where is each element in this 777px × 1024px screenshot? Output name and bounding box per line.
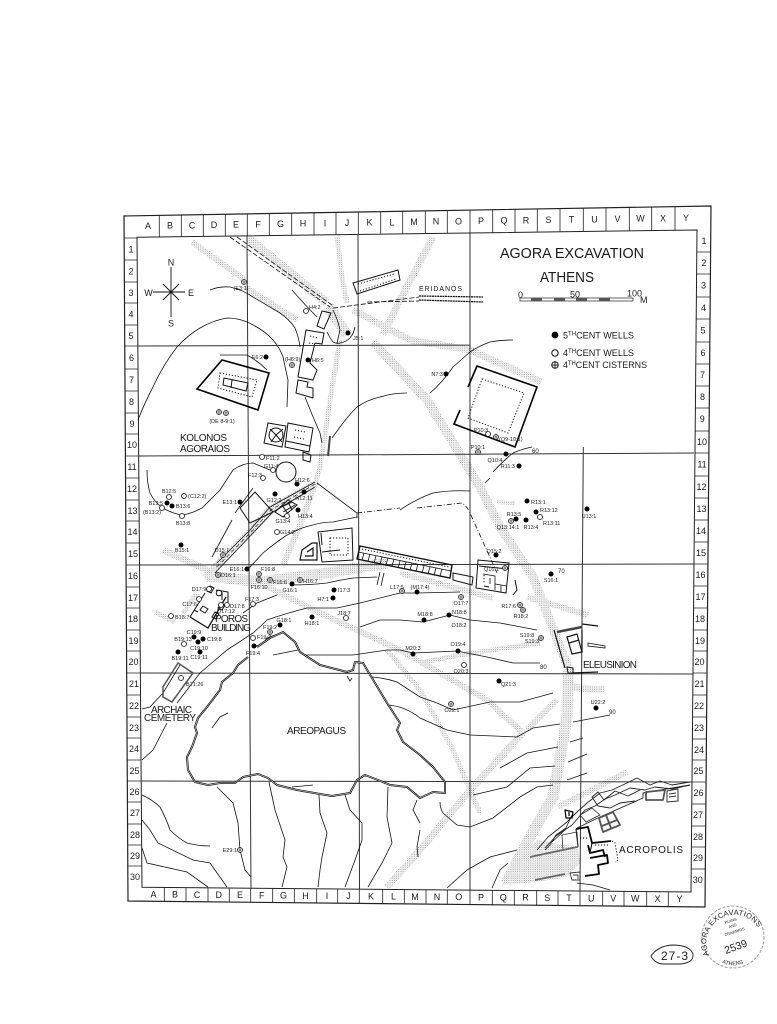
- legend: 4: [563, 348, 568, 358]
- well markers: 4th century wells with labels: (B13:2): [143, 510, 161, 516]
- circular archive stamp: AND: [728, 923, 737, 929]
- well markers: 5th century wells with labels: O19:4: [451, 642, 465, 648]
- row numbers right: 24: [694, 745, 704, 755]
- well markers: 5th century wells with labels: C19:10: [190, 646, 208, 652]
- row numbers right: 8: [700, 392, 705, 402]
- well markers: 4th century wells with labels: D17:9: [192, 587, 206, 593]
- cistern markers with labels: R18:2: [514, 614, 528, 620]
- place name labels: AGORAIOS: [180, 444, 230, 455]
- circular archive stamp: AGORA EXCAVATIONS: [701, 910, 762, 956]
- Eridanos channel and drains: [215, 237, 483, 573]
- compass rose: [144, 258, 194, 328]
- cistern markers with labels: Q13:14:1: [497, 525, 519, 531]
- building: Stoa of Attalos: [357, 546, 473, 586]
- well markers: 4th century wells with labels: H4:2: [309, 305, 321, 311]
- well markers: 4th century wells with labels: O20:3: [454, 669, 468, 675]
- title: ATHENS: [540, 270, 594, 286]
- compass rose: S: [168, 318, 174, 328]
- well markers: 4th century wells with labels: D17:12: [217, 609, 235, 615]
- well markers: 5th century wells with labels: S16:1: [544, 578, 558, 584]
- row numbers right: 22: [694, 701, 704, 711]
- cistern markers with labels: S19:3: [525, 639, 539, 645]
- row numbers left: 9: [129, 419, 135, 429]
- row numbers right: 7: [700, 370, 705, 380]
- row numbers right: 12: [696, 482, 707, 492]
- well markers: 5th century wells with labels: Q21:3: [501, 682, 516, 688]
- legend: TH: [568, 332, 576, 338]
- place name labels: ELEUSINION: [583, 660, 637, 671]
- buildings: southeast square and Q16 house: [476, 560, 517, 595]
- row numbers left: 10: [127, 440, 137, 450]
- well markers: 5th century wells with labels: R13:5: [507, 512, 521, 518]
- column letters bottom: ABCDEFGHIJKLMNOPQRSTUVWXY: [150, 890, 683, 904]
- cistern markers with labels: D15:1: [215, 548, 229, 554]
- well markers: 5th century wells with labels: H12:6: [295, 478, 310, 484]
- cistern markers with labels: F16:6: [273, 580, 287, 586]
- row numbers left: [127, 244, 140, 882]
- row numbers left: 16: [128, 571, 138, 581]
- well markers: 5th century wells with labels: E6:2: [252, 355, 263, 361]
- well markers: 4th century wells with labels: B19:13: [174, 637, 192, 643]
- row numbers left: 3: [128, 288, 134, 298]
- scale bar: [518, 288, 648, 305]
- row numbers left: 15: [128, 549, 138, 559]
- circular archive stamp: DRAWINGS: [724, 927, 746, 937]
- stippled ancient roads: [155, 237, 627, 887]
- cistern markers with labels: D16:1: [221, 573, 236, 579]
- buildings and walls: Acropolis: [530, 778, 690, 880]
- row numbers right: 28: [693, 832, 703, 842]
- row numbers right: 18: [695, 614, 705, 624]
- row numbers right: 17: [695, 592, 706, 602]
- legend: [552, 330, 647, 370]
- well markers: 4th century wells with labels: J18:7: [337, 611, 351, 617]
- well markers: 5th century wells with labels: M20:3: [405, 646, 421, 652]
- cistern markers with labels: E29:1: [223, 848, 237, 854]
- row numbers left: 11: [127, 462, 137, 472]
- row numbers right: 5: [700, 326, 706, 336]
- cistern markers with labels: P10:1: [471, 445, 485, 451]
- row numbers left: 7: [129, 375, 134, 385]
- row numbers left: 23: [129, 723, 139, 733]
- row numbers right: 25: [693, 766, 704, 776]
- well markers: 4th century wells with labels: B13:8: [176, 521, 190, 527]
- well markers: 5th century wells with labels: N7:3: [431, 372, 443, 378]
- well markers: 4th century wells with labels: G11:4: [264, 464, 278, 470]
- Areopagus rock outline: [187, 632, 445, 798]
- row numbers left: 18: [128, 614, 138, 624]
- place name labels: BUILDING: [211, 623, 251, 634]
- cistern markers with labels: F16:10: [250, 585, 268, 591]
- title: AGORA EXCAVATION: [500, 246, 644, 262]
- legend: 5: [563, 330, 568, 340]
- cistern markers with labels: S19:8: [520, 633, 534, 639]
- row numbers right: 4: [701, 303, 706, 313]
- cistern markers with labels: R17:6: [501, 604, 516, 610]
- legend: CENT CISTERNS: [576, 360, 647, 370]
- row numbers left: 22: [129, 701, 139, 711]
- row numbers right: 11: [697, 460, 707, 470]
- row numbers right: 27: [693, 810, 703, 820]
- title: [500, 246, 644, 286]
- well markers: 5th century wells with labels: R13:4: [524, 525, 538, 531]
- contour elevation labels: 80: [540, 665, 547, 671]
- row numbers right: 10: [697, 437, 707, 447]
- cistern markers with labels: [209, 280, 544, 854]
- well markers: 4th century wells with labels: B21:26: [186, 682, 203, 688]
- place name labels: CEMETERY: [144, 713, 196, 724]
- well markers: 4th century wells with labels: B18:7: [175, 615, 189, 621]
- place name labels: ARCHAIC: [151, 705, 192, 716]
- well markers: 4th century wells with labels: R13:11: [543, 521, 560, 527]
- compass rose: W: [144, 288, 153, 298]
- well markers: 5th century wells with labels: B15:1: [175, 548, 189, 554]
- catalogue number tag: 27-3: [661, 949, 688, 963]
- circular archive stamp: PLANS: [724, 917, 738, 925]
- compass rose: N: [168, 258, 174, 268]
- building: Eleusinion: [554, 624, 605, 673]
- cistern markers with labels: F19:2: [263, 625, 277, 631]
- place name labels: ERIDANOS: [419, 286, 462, 293]
- well markers: 5th century wells with labels: B13:5: [149, 501, 163, 507]
- legend: CENT WELLS: [576, 330, 634, 340]
- row numbers left: 14: [127, 527, 138, 537]
- well markers: 5th century wells with labels: M18:8: [417, 612, 433, 618]
- scale bar: 0: [518, 290, 523, 300]
- row numbers left: 21: [129, 679, 139, 689]
- row numbers left: 4: [128, 310, 134, 320]
- contour elevation labels: [532, 449, 616, 716]
- well markers: 5th century wells with labels: H13:4: [298, 514, 313, 520]
- well markers: 5th century wells with labels: N18:8: [452, 610, 467, 616]
- well markers: 4th century wells with labels: [143, 305, 560, 688]
- legend: CENT WELLS: [576, 348, 634, 358]
- place name labels: [144, 286, 683, 856]
- row numbers right: 3: [701, 280, 706, 290]
- cistern markers with labels: O17:7: [454, 601, 468, 607]
- well markers: 5th century wells with labels: C19:9: [187, 630, 201, 636]
- well markers: 4th century wells with labels: D17:8: [230, 604, 245, 610]
- contour elevation labels: 70: [558, 569, 565, 575]
- well markers: 5th century wells with labels: G12:2: [267, 498, 281, 504]
- row numbers left: 27: [130, 808, 140, 818]
- legend: TH: [568, 349, 576, 355]
- contour elevation labels: 90: [609, 710, 616, 716]
- cistern markers with labels: (Q9-10:1): [499, 437, 523, 443]
- legend: 4: [563, 360, 568, 370]
- grid frame with column and row cells: [124, 206, 711, 907]
- cistern markers with labels: (H6:9): [285, 357, 300, 363]
- legend: TH: [568, 361, 576, 367]
- well markers: 4th century wells with labels: (C12:2): [188, 494, 207, 500]
- well markers: 5th century wells with labels: E16:1: [230, 567, 244, 573]
- cistern markers with labels: O18:2: [452, 623, 466, 629]
- row numbers right: 26: [693, 788, 704, 798]
- row numbers left: 12: [127, 484, 137, 494]
- well markers: 5th century wells with labels: (M17:4): [411, 585, 430, 591]
- well markers: 5th century wells with labels: C19:11: [190, 655, 208, 661]
- row numbers left: 25: [129, 766, 140, 776]
- row numbers right: 20: [694, 657, 705, 667]
- well markers: 4th century wells with labels: G14:2: [280, 530, 295, 536]
- cistern markers with labels: (E3:1): [234, 286, 249, 292]
- row numbers left: 2: [128, 266, 134, 276]
- row numbers right: 9: [700, 414, 705, 424]
- scale bar: 50: [570, 290, 580, 300]
- well markers: 5th century wells with labels: F19:4: [246, 651, 260, 657]
- building: Poros Building group: [163, 586, 228, 702]
- row numbers right: 2: [701, 258, 707, 268]
- catalogue number tag: [651, 945, 693, 964]
- well markers: 5th century wells with labels: Q15:2: [487, 549, 501, 555]
- well markers: 4th century wells with labels: F12:3: [248, 473, 262, 479]
- row numbers right: 6: [700, 348, 706, 358]
- well markers: 4th century wells with labels: B12:5: [162, 489, 176, 495]
- well markers: 5th century wells with labels: G16:1: [283, 588, 297, 594]
- place name labels: AREOPAGUS: [287, 726, 346, 737]
- row numbers right: 15: [696, 548, 706, 558]
- row numbers right: 21: [694, 679, 705, 689]
- circular archive stamp: 2539: [723, 937, 749, 957]
- building: South Square peristyle at P-Q 8-10: [454, 366, 537, 447]
- place name labels: ACROPOLIS: [619, 845, 683, 856]
- row numbers left: 24: [129, 744, 139, 754]
- row numbers left: 17: [128, 593, 138, 603]
- place name labels: KOLONOS: [180, 433, 227, 444]
- row numbers right: 1: [701, 236, 707, 246]
- well markers: 5th century wells with labels: I17:3: [338, 588, 350, 594]
- scale bar: M: [640, 295, 648, 305]
- well markers: 5th century wells with labels: B19:11: [171, 656, 189, 662]
- cistern markers with labels: F16:8: [261, 567, 275, 573]
- cistern markers with labels: H16:7: [303, 579, 318, 585]
- column letters top: ABCDEFGHIJKLMNOPQRSTUVWXY: [145, 213, 689, 231]
- well markers: 5th century wells with labels: G18:1: [277, 618, 291, 624]
- row numbers left: 29: [130, 851, 140, 861]
- row numbers right: [693, 236, 707, 885]
- cistern markers with labels: L17:5: [390, 585, 404, 591]
- row numbers right: 23: [694, 723, 704, 733]
- cistern markers with labels: (DE 8-9:1): [209, 419, 235, 425]
- well markers: 5th century wells with labels: H6:5: [312, 358, 324, 364]
- well markers: 5th century wells with labels: R11:3: [501, 464, 515, 470]
- well markers: 4th century wells with labels: P10:3: [474, 428, 488, 434]
- cistern markers with labels: O22:1: [445, 708, 459, 714]
- place name labels: POROS: [215, 614, 248, 625]
- well markers: 4th century wells with labels: F19:7: [257, 635, 271, 641]
- row numbers right: 14: [696, 526, 706, 536]
- row numbers right: 29: [693, 853, 703, 863]
- well markers: 4th century wells with labels: F11:2: [266, 456, 280, 462]
- well markers: 4th century wells with labels: G13:4: [276, 519, 290, 525]
- contour lines: [138, 287, 610, 890]
- well markers: 5th century wells with labels: E13:1: [223, 500, 237, 506]
- compass rose: E: [188, 288, 194, 298]
- well markers: 4th century wells with labels: F17:3: [245, 597, 259, 603]
- well markers: 5th century wells with labels: R13:1: [531, 500, 546, 506]
- row numbers left: 1: [128, 244, 134, 254]
- well markers: 5th century wells with labels: B13:6: [176, 504, 190, 510]
- well markers: 5th century wells with labels: [149, 330, 605, 710]
- row numbers right: 30: [693, 875, 703, 885]
- scale bar: 100: [627, 288, 642, 298]
- row numbers left: 20: [128, 657, 139, 667]
- row numbers left: 26: [129, 787, 140, 797]
- well markers: 5th century wells with labels: U22:2: [591, 700, 605, 706]
- contour elevation labels: 60: [532, 449, 539, 455]
- row numbers left: 5: [128, 331, 134, 341]
- well markers: 5th century wells with labels: J5:1: [353, 336, 363, 342]
- row numbers right: 13: [696, 504, 707, 514]
- row numbers left: 13: [127, 506, 138, 516]
- well markers: 5th century wells with labels: H18:1: [305, 621, 319, 627]
- well markers: 5th century wells with labels: Q10:4: [488, 458, 502, 464]
- cistern markers with labels: Q16:1: [484, 567, 499, 573]
- row numbers left: 19: [128, 636, 139, 646]
- row numbers left: 6: [129, 353, 134, 363]
- row numbers left: 8: [129, 397, 134, 407]
- well markers: 5th century wells with labels: U13:1: [582, 514, 596, 520]
- row numbers left: 30: [130, 872, 140, 882]
- well markers: 5th century wells with labels: H12:11: [295, 496, 313, 502]
- well markers: 4th century wells with labels: C17:6: [182, 602, 197, 608]
- well markers: 5th century wells with labels: R13:12: [540, 508, 558, 514]
- row numbers left: 28: [130, 830, 140, 840]
- row numbers right: 16: [695, 570, 706, 580]
- well markers: 5th century wells with labels: H7:1: [317, 597, 329, 603]
- row numbers right: 19: [695, 636, 705, 646]
- circular archive stamp: ATHENS: [722, 960, 743, 966]
- buildings: north and west side: [197, 270, 400, 562]
- well markers: 5th century wells with labels: C19:8: [207, 637, 222, 643]
